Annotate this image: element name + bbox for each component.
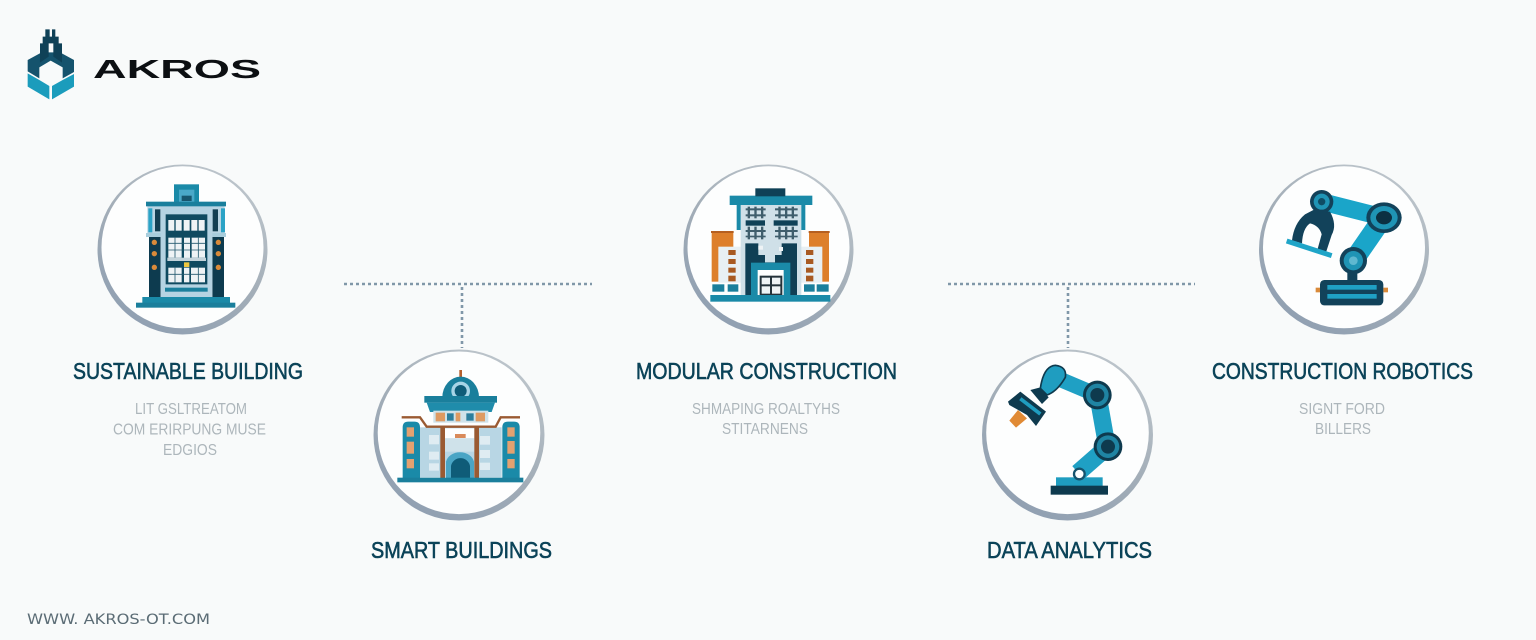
icon: modular building	[710, 188, 830, 302]
icon ring: smart buildings	[374, 350, 544, 520]
heading: sustainable building: SUSTAINABLE BUILDING	[73, 358, 303, 384]
connector: dotted line between Modular Construction and Construction Robotics	[948, 284, 1195, 348]
text block: construction robotics description	[1299, 401, 1385, 438]
heading: modular construction: MODULAR CONSTRUCTION	[636, 358, 897, 384]
connector: dotted line between Sustainable Building and Modular Construction	[344, 284, 592, 348]
logo wordmark: AKROS	[93, 54, 261, 84]
heading: construction robotics: CONSTRUCTION ROBOTICS	[1212, 358, 1473, 384]
text block: sustainable building description: EDGIOS	[163, 442, 217, 459]
heading: smart buildings: SMART BUILDINGS	[371, 537, 552, 563]
text block: modular construction description: STITARNENS	[722, 421, 808, 438]
icon ring: data analytics	[982, 350, 1153, 520]
panel: sustainable building	[73, 164, 303, 459]
icon: robotic arm with gripper	[1287, 190, 1402, 305]
icon: sustainable building tower	[136, 184, 235, 308]
icon: smart building with dome	[397, 370, 523, 482]
text block: sustainable building description: LIT GSLTREATOM	[135, 401, 247, 418]
text block: construction robotics description: BILLERS	[1315, 421, 1371, 438]
panel: construction robotics	[1212, 164, 1473, 438]
icon ring: construction robotics	[1259, 164, 1429, 334]
text block: sustainable building description	[113, 401, 266, 459]
icon ring: modular construction	[684, 164, 854, 334]
panel: smart buildings	[371, 350, 552, 563]
panel: data analytics	[982, 350, 1153, 563]
logo: AKROS	[28, 29, 261, 99]
text block: sustainable building description: COM ERIRPUNG MUSE	[113, 422, 266, 438]
footer: website address: WWW. AKROS-OT.COM	[27, 612, 210, 628]
panel: modular construction	[636, 164, 897, 438]
text block: modular construction description	[692, 401, 840, 438]
icon: robotic arm with orange tool	[1008, 365, 1122, 495]
heading: data analytics: DATA ANALYTICS	[987, 537, 1152, 563]
text block: construction robotics description: SIGNT FORD	[1299, 401, 1385, 418]
icon ring: sustainable building	[98, 164, 268, 334]
text block: modular construction description: SHMAPING ROALTYHS	[692, 401, 840, 418]
icon: logo hexagon and tower	[28, 29, 74, 99]
